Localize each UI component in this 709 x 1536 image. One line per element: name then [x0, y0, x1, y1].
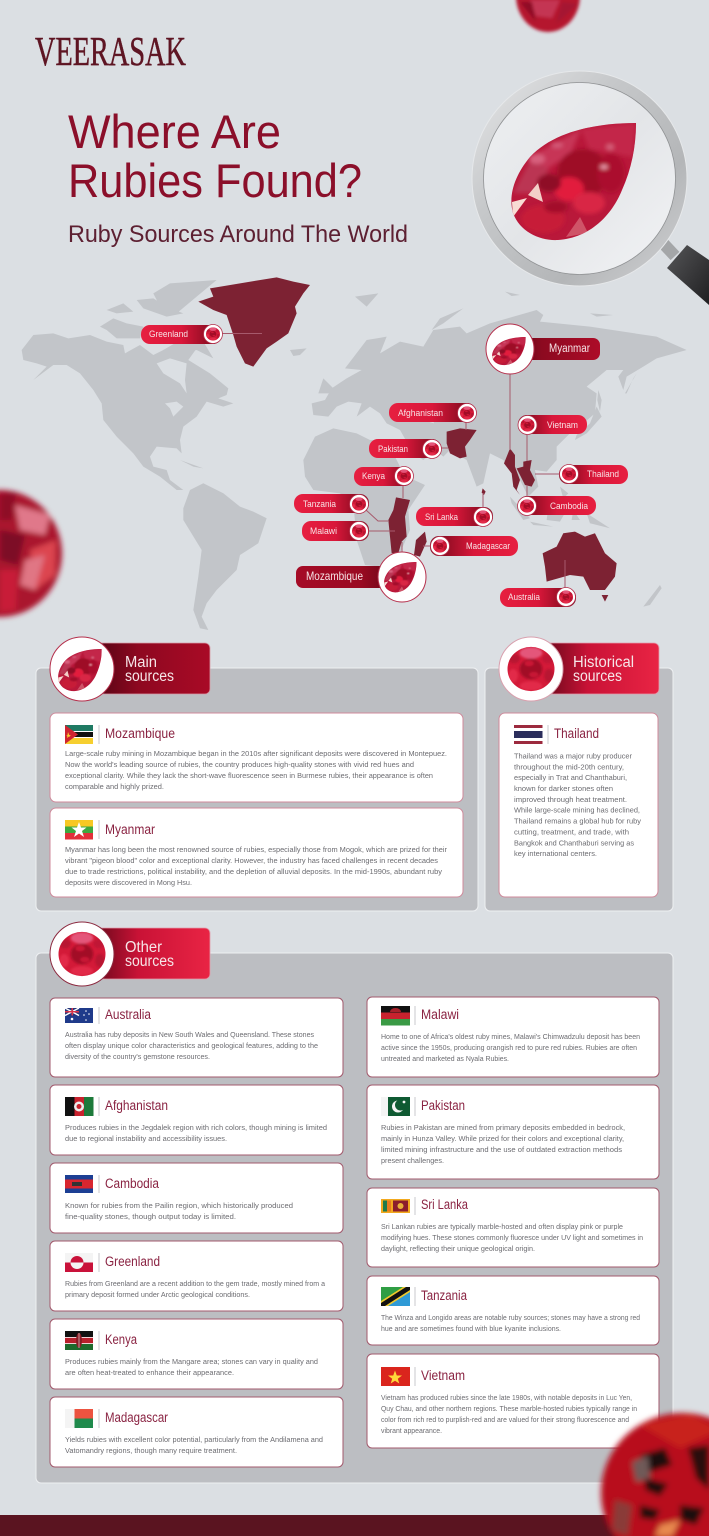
magnifying glass with ruby: [472, 71, 709, 305]
flag: Myanmar: [65, 820, 93, 840]
card: Australia: often display unique color characteristics and geological features, adding to the: [65, 1041, 318, 1050]
card: Madagascar: Madagascar: [105, 1410, 168, 1425]
card: Myanmar: [50, 808, 463, 897]
card: Tanzania: Tanzania: [421, 1288, 467, 1303]
card: Thailand: Bangkok and Chanthaburi serving as: [514, 838, 634, 847]
card: Sri Lanka: modifying hues. These stones commonly fluoresce under UV light and sometimes in: [381, 1233, 643, 1242]
flag: Thailand: [514, 725, 542, 744]
flag: Australia: [65, 1008, 93, 1023]
heading: other sources: sources: [125, 953, 174, 970]
marker: Afghanistan: [389, 403, 476, 422]
card: Malawi: [367, 997, 659, 1077]
world map: [22, 277, 687, 630]
card: Cambodia: Known for rubies from the Pailin region, which historically produced: [65, 1201, 293, 1210]
heading: other sources: [50, 922, 210, 986]
panel: other sources: [36, 922, 673, 1483]
card: Myanmar: vibrant "pigeon blood" color and exceptional clarity. However, the industry has faced challenges in recent decades: [65, 856, 438, 865]
card: Vietnam: vibrant appearance.: [381, 1426, 442, 1435]
marker: Thailand: Thailand: [587, 469, 619, 480]
card: Thailand: Thailand remains a global hub for ruby: [514, 817, 641, 826]
marker: Malawi: [302, 521, 369, 541]
card: Kenya: Kenya: [105, 1332, 137, 1347]
flag: Tanzania: [381, 1287, 410, 1306]
panel: historical sources: [485, 637, 673, 911]
land: Eurasia, Africa and islands: [303, 292, 687, 607]
flag: Afghanistan: [65, 1097, 94, 1116]
highlighted country: Greenland: [198, 277, 310, 367]
title: Where Are: [68, 105, 281, 158]
card: Kenya: [50, 1319, 343, 1389]
card: Pakistan: Rubies in Pakistan are mined from primary deposits embedded in bedrock,: [381, 1123, 625, 1132]
card: Malawi: active since the 1950s, producing orangish red to pure red rubies. Rubies are often: [381, 1043, 637, 1052]
card: Australia: diversity of the country's gemstone resources.: [65, 1052, 210, 1061]
flag: Madagascar: [65, 1409, 93, 1428]
marker: Tanzania: [294, 494, 369, 514]
card: Thailand: especially in Trat and Chanthaburi,: [514, 773, 627, 782]
heading: historical sources: Historical: [573, 654, 634, 671]
flag: Kenya: [65, 1331, 93, 1350]
card: Malawi: Malawi: [421, 1007, 459, 1022]
card: Thailand: Thailand: [554, 726, 599, 741]
flag: Cambodia: [65, 1175, 93, 1193]
marker: Sri Lanka: [416, 507, 493, 526]
card: Greenland: primary deposit formed under Arctic geological conditions.: [65, 1290, 250, 1299]
card: Myanmar: Myanmar has long been the most renowned source of rubies, especially those from Mogok, which are prized for their: [65, 845, 447, 854]
card: Sri Lanka: daylight, reflecting their unique geological origin.: [381, 1244, 535, 1253]
marker: Greenland: Greenland: [149, 329, 188, 340]
card: Tanzania: The Winza and Longido areas are notable ruby sources; stones may have a strong red: [381, 1313, 640, 1322]
card: Greenland: [50, 1241, 343, 1311]
connector lines: [222, 334, 565, 589]
marker: Afghanistan: Afghanistan: [398, 408, 443, 419]
card: Australia: [50, 998, 343, 1077]
panel: main sources: [36, 637, 478, 911]
card: Pakistan: mainly in Hunza Valley. While prized for their colors and exceptional clarity,: [381, 1134, 624, 1143]
card: Mozambique: [50, 713, 463, 802]
card: Sri Lanka: Sri Lankan rubies are typically marble-hosted and often display pink or purple: [381, 1222, 623, 1231]
card: Thailand: key international centers.: [514, 849, 597, 858]
marker: Cambodia: Cambodia: [550, 501, 589, 512]
marker: Pakistan: Pakistan: [378, 444, 408, 455]
card: Kenya: are often heat-treated to enhance their appearance.: [65, 1368, 234, 1377]
card: Greenland: Greenland: [105, 1254, 160, 1269]
marker: Cambodia: [518, 496, 596, 516]
land: Americas and Arctic: [22, 280, 307, 630]
card: Tanzania: [367, 1276, 659, 1345]
marker: Sri Lanka: Sri Lanka: [425, 512, 459, 523]
card: Australia: Australia has ruby deposits in New South Wales and Queensland. These stones: [65, 1030, 314, 1039]
card: Mozambique: comparable and highly prized.: [65, 782, 164, 791]
marker: Madagascar: [430, 536, 518, 556]
card: Vietnam: Quy Chau, and other northern regions. These marble-hosted rubies typically range in: [381, 1404, 637, 1413]
heading: historical sources: sources: [573, 668, 622, 685]
handle: [660, 240, 709, 305]
card: Myanmar: due to trade restrictions, political instability, and the depletion of alluvial deposits. In the mid-1990s, abundant ruby: [65, 867, 442, 876]
card: Sri Lanka: [367, 1188, 659, 1267]
card: Thailand: throughout the mid-20th century,: [514, 762, 624, 771]
marker: Australia: Australia: [508, 592, 541, 603]
card: Madagascar: Yields rubies with excellent color potential, particularly from the Andilamena and: [65, 1435, 323, 1444]
card: Afghanistan: [50, 1085, 343, 1155]
marker: Greenland: [141, 324, 222, 344]
marker: Madagascar: Madagascar: [466, 541, 510, 552]
footer band: [0, 1515, 709, 1536]
card: Afghanistan: Produces rubies in the Jegdalek region with rich colors, though mining is limited: [65, 1123, 327, 1132]
card: Vietnam: Vietnam has produced rubies since the late 1980s, with notable deposits in Luc Yen,: [381, 1393, 632, 1402]
decorative blurred ruby: left: [0, 490, 62, 617]
card: Tanzania: hue and are sometimes found with blue kyanite inclusions.: [381, 1324, 561, 1333]
marker: Vietnam: Vietnam: [547, 420, 578, 431]
title: Rubies Found?: [68, 154, 362, 207]
card: Cambodia: [50, 1163, 343, 1233]
subtitle: Ruby Sources Around The World: [68, 221, 408, 248]
flag: Sri Lanka: [381, 1199, 410, 1213]
card: Thailand: Thailand was a major ruby producer: [514, 752, 632, 760]
card: Thailand: improved through heat treatment.: [514, 795, 627, 804]
flag: Pakistan: [381, 1097, 410, 1116]
card: Mozambique: exceptional clarity. While they lack the short-wave fluorescence seen in Burmese rubies, their appearance is often: [65, 771, 433, 780]
card: Australia: Australia: [105, 1007, 151, 1022]
card: Vietnam: [367, 1354, 659, 1448]
marker: Vietnam: [518, 415, 587, 434]
card: Thailand: cutting, treatment, and trade, with: [514, 827, 629, 836]
marker: Mozambique: Mozambique: [306, 569, 363, 583]
decorative blurred ruby: bottom right: [601, 1413, 709, 1536]
card: Pakistan: limited mining infrastructure and the use of outdated extraction methods: [381, 1145, 622, 1154]
heading: main sources: [50, 637, 210, 701]
marker: Tanzania: Tanzania: [303, 499, 337, 510]
card: Mozambique: Now the world's leading source of rubies, the country produces high-quality stones with vivid red hues and: [65, 760, 414, 769]
card: Myanmar: deposits were discovered in Mong Hsu.: [65, 878, 192, 887]
card: Thailand: [499, 713, 658, 897]
card: Kenya: Produces rubies mainly from the Mangare area; stones can vary in quality and: [65, 1357, 318, 1366]
card: Pakistan: present challenges.: [381, 1156, 444, 1165]
card: Cambodia: Cambodia: [105, 1176, 159, 1191]
flag: Malawi: [381, 1006, 410, 1026]
marker: Myanmar: Myanmar: [549, 343, 590, 355]
card: Madagascar: Vatomandry regions, though many require treatment.: [65, 1446, 237, 1455]
card: Sri Lanka: Sri Lanka: [421, 1197, 468, 1212]
card: Thailand: While large-scale mining has declined,: [514, 806, 640, 815]
card: Mozambique: Large-scale ruby mining in Mozambique began in the 2010s after significant deposits were discovered in Montepuez.: [65, 749, 447, 758]
marker: Pakistan: [369, 439, 442, 458]
card: Cambodia: fine-quality stones, though output today is limited.: [65, 1212, 236, 1221]
heading: other sources: Other: [125, 939, 162, 956]
heading: main sources: sources: [125, 668, 174, 685]
marker: Thailand: [559, 464, 628, 484]
marker: Malawi: Malawi: [310, 526, 337, 537]
card: Vietnam: color from rich red to purplish-red and are valued for their strong fluorescence and: [381, 1415, 629, 1424]
card: Vietnam: Vietnam: [421, 1368, 465, 1383]
heading: main sources: Main: [125, 654, 157, 671]
card: Afghanistan: Afghanistan: [105, 1098, 168, 1113]
card: Pakistan: Pakistan: [421, 1098, 465, 1113]
highlighted countries: [388, 428, 617, 602]
card: Malawi: untreated and marketed as Nyala Rubies.: [381, 1054, 509, 1063]
card: Afghanistan: due to regional instability and accessibility issues.: [65, 1134, 227, 1143]
lens: [472, 71, 687, 286]
heading: historical sources: [499, 637, 659, 701]
title: [68, 105, 362, 207]
card: Myanmar: Myanmar: [105, 822, 155, 837]
flag: Mozambique: [65, 725, 93, 744]
marker: Australia: [500, 588, 576, 607]
card: Malawi: Home to one of Africa's oldest ruby mines, Malawi's Chimwadzulu deposit has been: [381, 1032, 640, 1041]
card: Greenland: Rubies from Greenland are a recent addition to the gem trade, mostly mined from a: [65, 1279, 326, 1288]
card: Thailand: known for darker stones often: [514, 784, 613, 793]
marker: Kenya: [354, 466, 414, 486]
marker: Mozambique: [296, 552, 426, 602]
card: Pakistan: [367, 1085, 659, 1179]
card: Madagascar: [50, 1397, 343, 1467]
logo: VEERASAK: [35, 28, 186, 74]
marker: Myanmar: [486, 324, 600, 374]
card: Mozambique: Mozambique: [105, 726, 175, 741]
marker: Kenya: Kenya: [362, 471, 386, 482]
flag: Greenland: [65, 1253, 93, 1272]
decorative blurred ruby: top: [516, 0, 580, 32]
flag: Vietnam: [381, 1367, 410, 1386]
ruby: [506, 118, 641, 243]
